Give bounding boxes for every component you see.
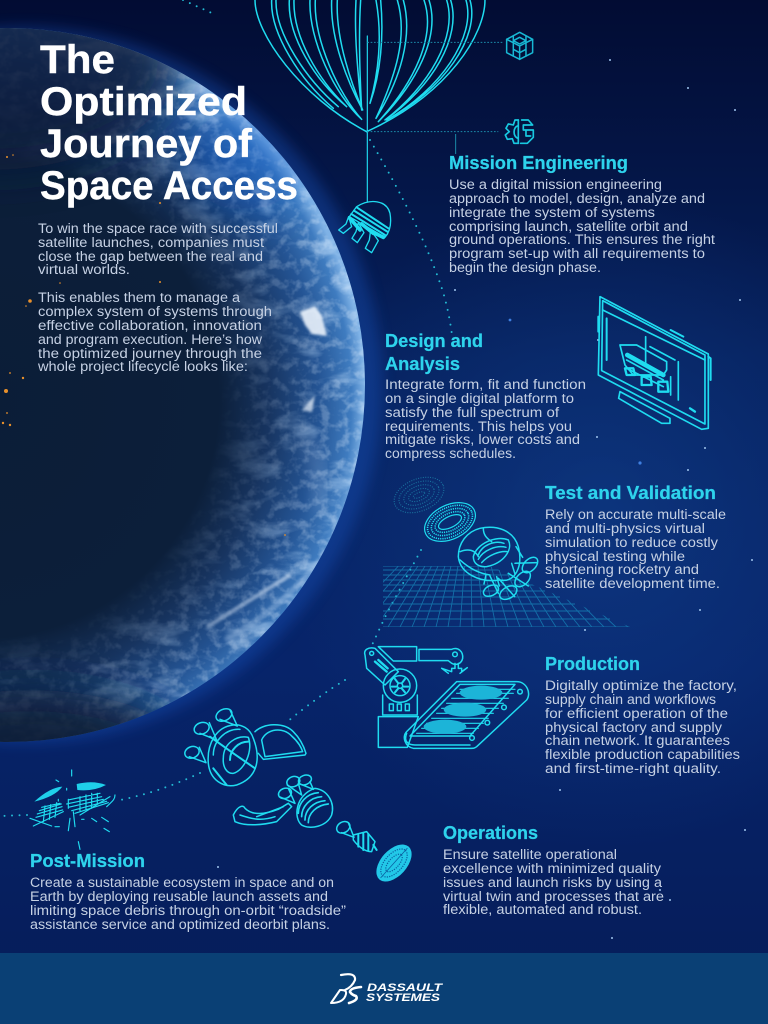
icon: monitor [598,297,711,429]
icon: engine under test [458,527,541,602]
icon: small rocket stage [335,819,377,852]
text: test and validation body: simulation to reduce costly [545,535,718,550]
text: operations body: issues and launch risks by using a [443,875,663,890]
text: operations body: virtual twin and processes that are [443,889,664,904]
text: operations body: flexible, automated and robust. [443,902,642,917]
text: test and validation body [545,507,726,591]
heading: design and analysis [385,331,483,374]
text: production body: physical factory and supply [545,720,722,735]
planet [0,20,386,748]
text: post-mission body: assistance service and optimized deorbit plans. [30,917,330,932]
text: mission engineering body: Use a digital mission engineering [449,177,662,192]
text: mission engineering body: comprising launch, satellite orbit and [449,219,688,234]
text: production body: flexible production capabilities [545,747,740,762]
intro text: complex system of systems through [38,304,272,319]
intro text: satellite launches, companies must [38,235,264,250]
icon: dotted disc [370,838,418,888]
logo: Dassault Systemes: SYSTEMES [366,992,441,1004]
text: post-mission body: limiting space debris through on-orbit “roadside” [30,903,346,918]
text: design and analysis body: Integrate form, fit and function [385,377,586,392]
text: post-mission body [30,875,346,932]
icon: balloon [255,0,503,202]
heading: design and analysis: Analysis [385,354,460,374]
text: mission engineering body: program set-up with all requirements to [449,246,705,261]
text: production body [545,678,740,776]
route: dotted journey lines [0,0,452,816]
footer band [0,953,768,1024]
intro text: effective collaboration, innovation [38,318,262,333]
text: test and validation body: Rely on accurate multi-scale [545,507,726,522]
text: mission engineering body: ground operations. This ensures the right [449,232,715,247]
intro text: whole project lifecycle looks like: [37,359,248,374]
title: The [40,38,115,82]
text: production body: and first-time-right quality. [545,761,721,776]
text: design and analysis body: mitigate risks, lower costs and [385,432,580,447]
text: production body: Digitally optimize the factory, [545,678,737,693]
icon: robot arm and conveyor [365,647,529,748]
text: mission engineering body: integrate the system of systems [449,205,655,220]
text: test and validation body: and multi-physics virtual [545,521,705,536]
icon: engine with fairing [183,706,306,786]
heading: design and analysis: Design and [385,331,483,351]
text: production body: for efficient operation of the [545,706,728,721]
intro text: virtual worlds. [38,262,130,277]
text: production body: chain network. It guarantees [545,733,730,748]
icon: perspective grid [383,566,630,627]
text: operations body [443,847,664,917]
panel: operations [443,823,664,917]
icon: wireframe torus [418,495,482,549]
text: test and validation body: physical testing while [545,549,685,564]
icon: dotted torus [389,470,449,520]
text: mission engineering body [449,177,715,275]
text: mission engineering body: approach to model, design, analyze and [449,191,705,206]
intro text: and program execution. Here’s how [38,332,262,347]
intro text [37,221,278,374]
title [40,38,298,208]
panel: mission engineering [449,153,715,275]
intro text: To win the space race with successful [38,221,278,236]
text: design and analysis body: compress schedules. [385,446,516,461]
text: design and analysis body: satisfy the full spectrum of [385,405,559,420]
heading: mission engineering: Mission Engineering [449,153,628,173]
icon: gear [505,120,533,143]
heading: production: Production [545,654,640,674]
text: design and analysis body: on a single digital platform to [385,391,574,406]
logo: Dassault Systemes [331,974,444,1004]
title: Optimized [40,80,247,124]
text: operations body: excellence with minimized quality [443,861,661,876]
heading: post-mission: Post-Mission [30,851,145,871]
text: test and validation body: satellite development time. [545,576,720,591]
text: test and validation body: shortening rocketry and [545,562,699,577]
icon: payload capsule [339,202,391,253]
panel: test and validation [545,483,726,591]
panel: post-mission [30,851,346,932]
text: production body: supply chain and workflows [545,692,716,707]
text: mission engineering body: begin the design phase. [449,260,601,275]
panel: production [545,654,740,776]
intro text: This enables them to manage a [38,290,241,305]
icon: wireframe cube [507,32,533,59]
icon: satellite debris [30,770,115,849]
heading: operations: Operations [443,823,538,843]
heading: test and validation: Test and Validation [545,483,716,503]
intro text: the optimized journey through the [38,346,262,361]
icon: engine with detached fairing [233,773,332,827]
text: design and analysis body: requirements. This helps you [385,419,572,434]
text: post-mission body: Earth by deploying reusable launch assets and [30,889,328,904]
text: post-mission body: Create a sustainable ecosystem in space and on [30,875,334,890]
title: Journey of [40,122,253,166]
text: design and analysis body [385,377,586,461]
logo: Dassault Systemes: DASSAULT [367,982,444,994]
panel: design and analysis [385,331,586,461]
text: operations body: Ensure satellite operational [443,847,617,862]
intro text: close the gap between the real and [38,249,263,264]
title: Space Access [40,164,298,208]
